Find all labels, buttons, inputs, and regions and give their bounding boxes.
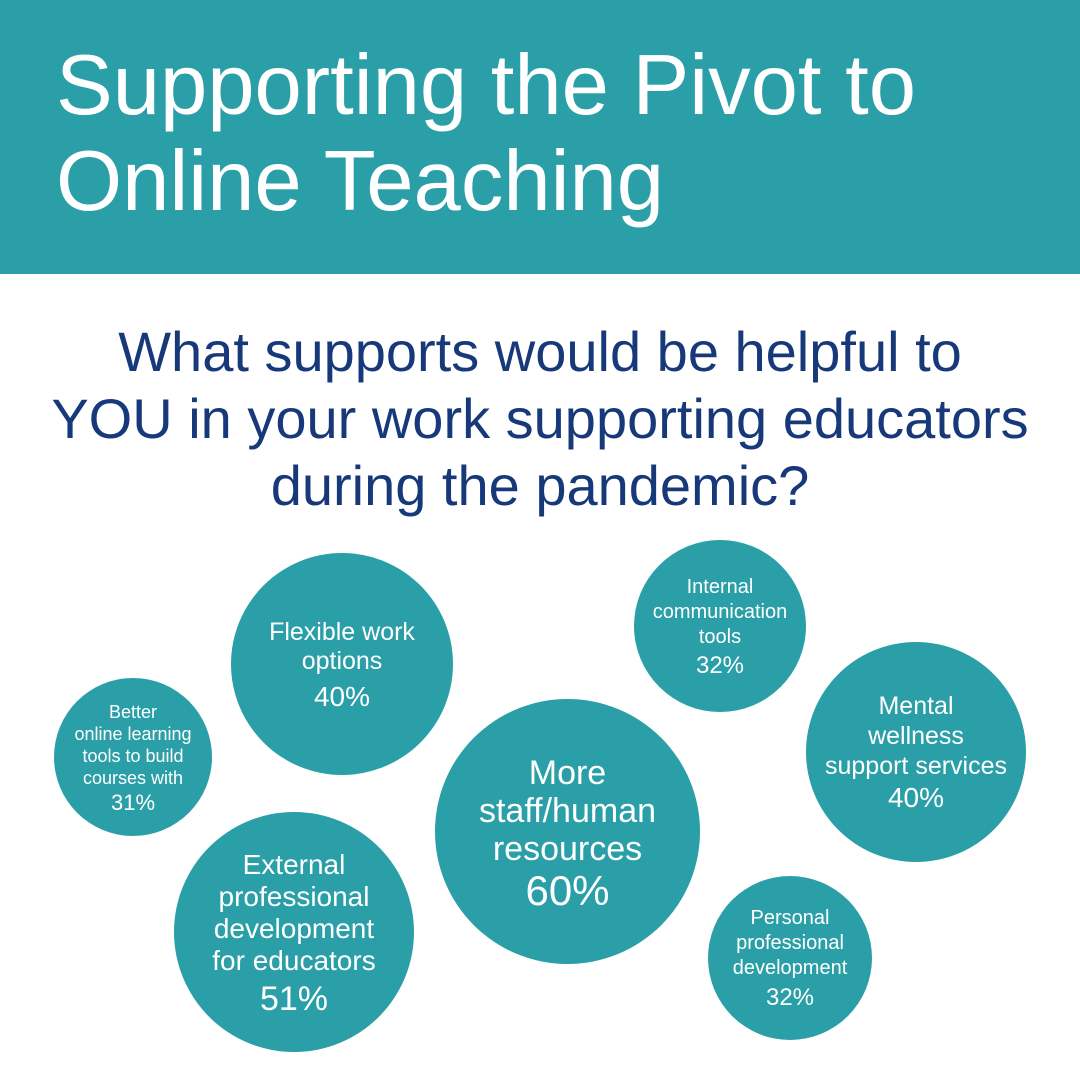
bubble: mental wellness: 40% bbox=[888, 782, 944, 813]
header banner bbox=[0, 0, 1080, 274]
bubble: internal communication tools bbox=[634, 540, 806, 712]
bubble: personal professional development: 32% bbox=[766, 984, 814, 1011]
bubble: better online learning tools bbox=[54, 678, 212, 836]
question heading bbox=[51, 320, 1029, 517]
bubble: more staff: More bbox=[529, 754, 606, 792]
bubble: external professional development: development bbox=[214, 913, 374, 944]
bubble: better online learning tools: online learning bbox=[74, 724, 192, 744]
question heading: during the pandemic? bbox=[271, 454, 809, 517]
bubble: more staff: 60% bbox=[525, 866, 610, 914]
title: Online Teaching bbox=[56, 134, 664, 229]
bubble: internal communication tools: tools bbox=[699, 626, 741, 648]
bubble: better online learning tools: tools to build bbox=[82, 746, 184, 766]
bubble: flexible work options: options bbox=[302, 646, 382, 674]
bubble: mental wellness: support services bbox=[825, 752, 1007, 780]
bubble: better online learning tools: courses with bbox=[83, 768, 183, 788]
bubble: flexible work options: Flexible work bbox=[269, 618, 415, 646]
bubble: better online learning tools: 31% bbox=[111, 790, 155, 814]
bubble: personal professional development bbox=[708, 876, 872, 1040]
bubble: external professional development: 51% bbox=[260, 980, 328, 1018]
bubble: internal communication tools: 32% bbox=[696, 652, 744, 678]
bubble: flexible work options bbox=[231, 553, 453, 775]
bubble: external professional development: for educators bbox=[212, 945, 376, 976]
bubble: external professional development: External bbox=[243, 849, 345, 880]
bubble: external professional development bbox=[174, 812, 414, 1052]
bubble: internal communication tools: Internal bbox=[687, 576, 753, 598]
title: Supporting the Pivot to bbox=[56, 38, 916, 133]
bubble: flexible work options: 40% bbox=[314, 680, 370, 712]
bubble: personal professional development: professional bbox=[736, 932, 844, 954]
bubble: mental wellness: wellness bbox=[868, 722, 964, 750]
bubble: mental wellness bbox=[806, 642, 1026, 862]
bubble: more staff: staff/human bbox=[479, 792, 656, 830]
question heading: YOU in your work supporting educators bbox=[51, 387, 1029, 450]
bubble: more staff bbox=[435, 699, 700, 964]
bubble: more staff: resources bbox=[493, 830, 642, 868]
title bbox=[56, 38, 916, 229]
bubble: personal professional development: Personal bbox=[751, 907, 829, 929]
bubble: internal communication tools: communication bbox=[653, 600, 787, 622]
bubble: mental wellness: Mental bbox=[878, 692, 954, 720]
question heading: What supports would be helpful to bbox=[118, 320, 962, 383]
bubble: external professional development: professional bbox=[218, 881, 369, 912]
bubble: better online learning tools: Better bbox=[109, 702, 157, 722]
bubble: personal professional development: development bbox=[733, 957, 847, 979]
